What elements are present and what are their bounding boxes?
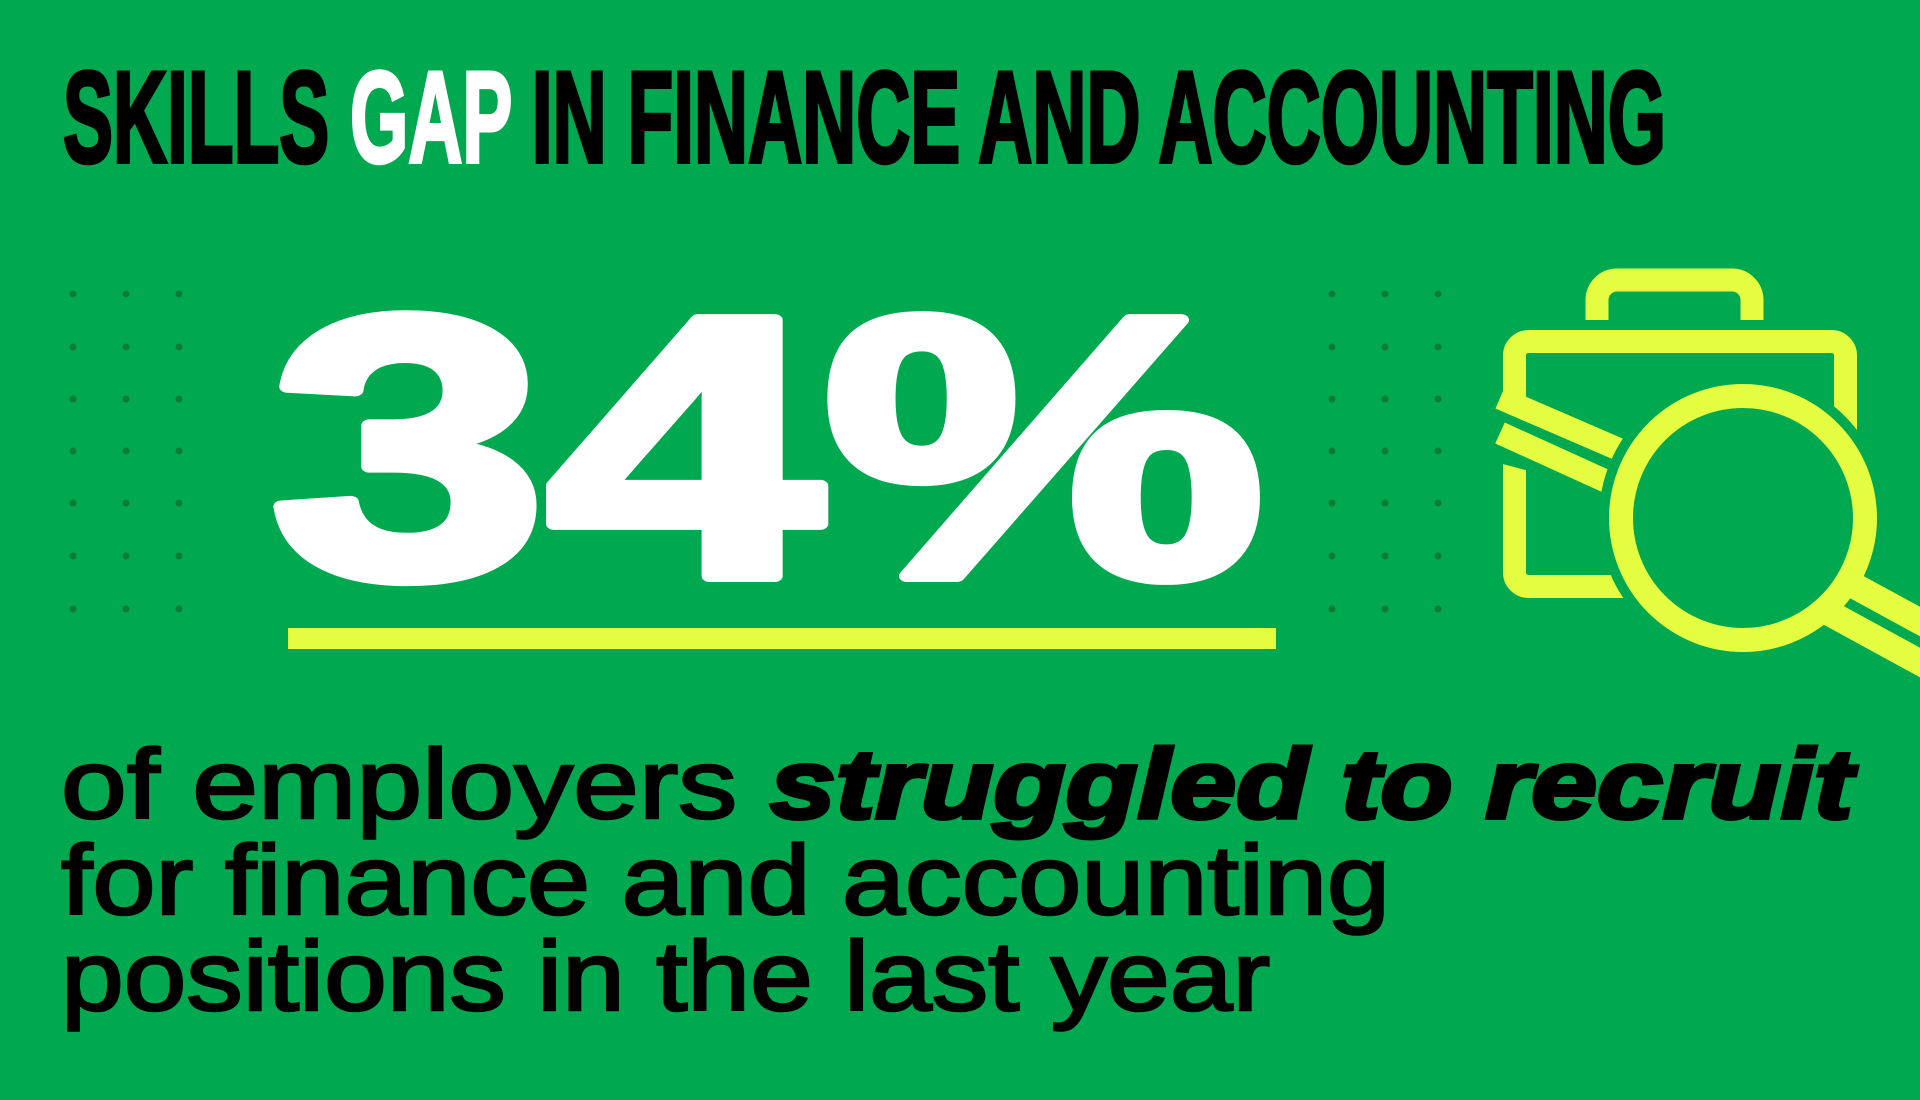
decorative dot grid left [70, 290, 182, 612]
line 1: of employers struggled to recruit [61, 729, 1857, 839]
body text [61, 729, 1857, 1031]
icon: briefcase with magnifier [1495, 280, 1920, 670]
line 3: positions in the last year [61, 921, 1270, 1031]
line 2: for finance and accounting [61, 825, 1390, 935]
underline bar [288, 628, 1276, 649]
decorative dot grid right [1328, 290, 1442, 612]
big statistic: 34% [270, 239, 1265, 655]
